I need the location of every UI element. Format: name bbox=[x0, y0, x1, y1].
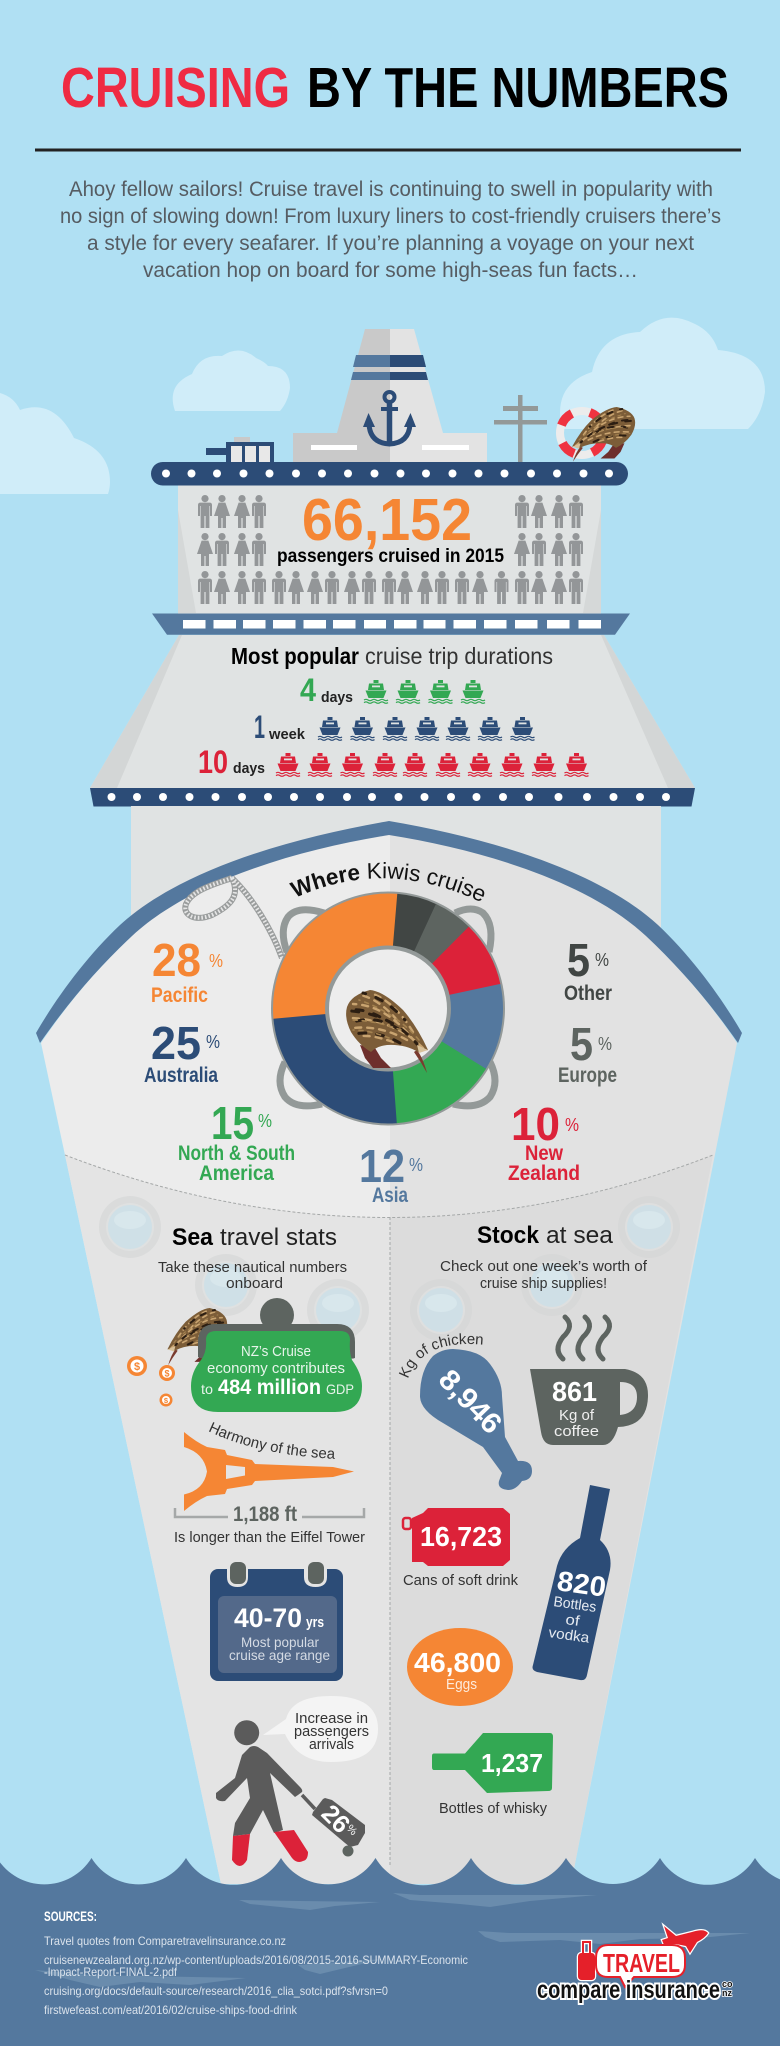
icon: Eiffel tower on its side bbox=[184, 1432, 354, 1511]
figure: traveller with suitcase: 26 bbox=[316, 1799, 355, 1839]
cloud: left bbox=[0, 393, 110, 494]
whisky bottle: 1,237 bbox=[481, 1748, 543, 1778]
heading: sea travel stats: Sea bbox=[172, 1224, 214, 1251]
heading: stock at sea bbox=[477, 1222, 614, 1249]
label: Pacific 28% bbox=[151, 934, 223, 1007]
icon: plane bbox=[662, 1926, 708, 1953]
coffee cup: Kg of bbox=[559, 1407, 595, 1424]
row: 10 days: days bbox=[233, 761, 265, 777]
calendar: age range: cruise age range bbox=[229, 1647, 330, 1663]
speech bubble: passengers arrivals bbox=[263, 1696, 378, 1762]
label: North and South America 15%: 15 bbox=[211, 1097, 254, 1149]
soft drink can: 16,723 bbox=[420, 1521, 502, 1552]
pictogram: passengers bbox=[197, 495, 583, 604]
icon: dollar coins: $ bbox=[164, 1396, 169, 1405]
icon: chicken drumstick: 8,946 bbox=[432, 1364, 508, 1441]
sources: -Impact-Report-FINAL-2.pdf bbox=[44, 1965, 178, 1979]
speech bubble: passengers arrivals: passengers bbox=[294, 1724, 369, 1740]
sources: SOURCES: bbox=[44, 1909, 97, 1924]
label: Europe 5%: 5 bbox=[570, 1018, 593, 1070]
purse: GDP stat: 484 million bbox=[218, 1376, 321, 1399]
coffee cup: 861 bbox=[552, 1376, 597, 1407]
calendar: age range: 40-70 bbox=[234, 1603, 302, 1633]
icon: dollar coins bbox=[127, 1356, 175, 1406]
sea bbox=[0, 1858, 780, 2046]
figure: traveller with suitcase: % bbox=[344, 1823, 359, 1838]
label: New Zealand 10% bbox=[508, 1098, 580, 1185]
heading: trip durations: cruise trip durations bbox=[365, 643, 553, 669]
sources: cruisenewzealand.org.nz/wp-content/uploads/2016/08/2015-2016-SUMMARY-Economic bbox=[44, 1953, 468, 1967]
rope bbox=[185, 878, 282, 958]
icon: chicken drumstick bbox=[420, 1349, 532, 1490]
row: 1 week: 1 bbox=[254, 709, 265, 745]
label: New Zealand 10%: Zealand bbox=[508, 1162, 580, 1185]
icon: lifebuoy bbox=[560, 411, 604, 455]
purse: GDP stat: GDP bbox=[326, 1381, 354, 1397]
icon: dollar coins: $ bbox=[164, 1368, 170, 1378]
logo: travel compare insurance: co bbox=[722, 1979, 733, 1989]
text: harmony of the sea: Harmony of the sea bbox=[209, 1422, 335, 1459]
intro text: a style for every seafarer. If you’re planning a voyage on your next bbox=[87, 232, 694, 255]
length bracket: 1,188 ft bbox=[233, 1503, 297, 1526]
water reflections bbox=[35, 1893, 750, 1987]
logo: travel compare insurance: nz bbox=[722, 1988, 732, 1998]
mast bbox=[494, 395, 547, 462]
heading: stock at sea: at sea bbox=[546, 1222, 614, 1249]
heading: where kiwis cruise: Where Kiwis cruise bbox=[289, 862, 484, 901]
label: Australia 25% bbox=[144, 1017, 220, 1087]
length bracket bbox=[175, 1503, 364, 1526]
vodka bottle bbox=[532, 1485, 611, 1680]
sources bbox=[44, 1909, 468, 2017]
row: 1 week: week bbox=[268, 727, 306, 743]
text: cans of soft drink: Cans of soft drink bbox=[403, 1572, 518, 1589]
icon: anchor bbox=[363, 392, 416, 445]
funnel bbox=[337, 329, 443, 433]
intro text: no sign of slowing down! From luxury liners to cost-friendly cruisers there’s bbox=[60, 205, 721, 228]
intro text bbox=[60, 178, 721, 282]
whisky bottle bbox=[432, 1733, 553, 1793]
label: Australia 25%: Australia bbox=[144, 1064, 218, 1087]
figure: traveller with suitcase bbox=[216, 1720, 365, 1866]
row: 4 days: days bbox=[321, 690, 353, 706]
sources: Travel quotes from Comparetravelinsurance.co.nz bbox=[44, 1934, 286, 1948]
text: sea travel intro bbox=[158, 1259, 347, 1292]
bridge bbox=[206, 437, 274, 462]
hull column bbox=[131, 806, 661, 1036]
text: longer than eiffel tower: Is longer than the Eiffel Tower bbox=[174, 1529, 365, 1546]
bow hull bbox=[41, 835, 737, 1884]
hull dashed seams bbox=[65, 1155, 713, 1865]
hull section 2 bbox=[90, 635, 695, 788]
label: Other 5%: 5 bbox=[567, 934, 590, 986]
row: 1 week bbox=[254, 709, 534, 745]
title bbox=[61, 56, 729, 120]
logo: travel compare insurance: TRAVEL bbox=[603, 1948, 680, 1978]
label: Europe 5%: % bbox=[598, 1034, 612, 1054]
label: Pacific 28%: 28 bbox=[152, 934, 201, 986]
vodka bottle: Bottles bbox=[552, 1594, 597, 1616]
stat: passengers cruised: passengers cruised in 2015 bbox=[277, 545, 504, 567]
purse: GDP stat: NZ’s Cruise bbox=[241, 1343, 311, 1360]
label: Australia 25%: % bbox=[206, 1032, 220, 1052]
label: Other 5% bbox=[564, 934, 612, 1005]
blue bow arc bbox=[36, 821, 742, 1043]
kiwi behind purse bbox=[167, 1308, 227, 1365]
label: Pacific 28%: Pacific bbox=[151, 984, 208, 1007]
stat: passengers cruised bbox=[277, 487, 504, 567]
soft drink can bbox=[403, 1508, 510, 1566]
text: kg of chicken: Kg of chicken bbox=[398, 1333, 483, 1378]
top deck with portholes bbox=[151, 462, 628, 486]
label: North and South America 15%: % bbox=[258, 1111, 272, 1131]
kiwi on deck bbox=[572, 407, 635, 462]
row: 10 days bbox=[198, 744, 588, 780]
speech box bbox=[596, 1945, 685, 1987]
coffee cup bbox=[530, 1369, 648, 1445]
label: New Zealand 10%: New bbox=[525, 1142, 564, 1165]
purse: GDP stat: to bbox=[201, 1381, 213, 1397]
ship superstructure bbox=[206, 329, 635, 462]
vodka bottle: 820 bbox=[555, 1565, 608, 1603]
lifebuoy handles bbox=[280, 909, 495, 1106]
vodka bottle: vodka bbox=[547, 1625, 591, 1647]
navy porthole band bbox=[90, 788, 695, 806]
calendar: age range: Most popular bbox=[241, 1634, 319, 1650]
icon: suitcase bbox=[578, 1942, 595, 1980]
label: North and South America 15%: North & South bbox=[178, 1142, 295, 1165]
donut chart: where kiwis cruise bbox=[263, 883, 513, 1134]
calendar: age range: yrs bbox=[306, 1614, 324, 1631]
row: 4 days bbox=[300, 672, 485, 708]
label: Pacific 28%: % bbox=[209, 951, 223, 971]
vodka bottle: of bbox=[564, 1612, 582, 1630]
cloud: centre bbox=[173, 350, 290, 411]
cloud: right bbox=[560, 318, 765, 429]
label: Other 5%: Other bbox=[564, 982, 612, 1005]
heading: trip durations bbox=[231, 643, 553, 669]
eggs bbox=[407, 1628, 513, 1706]
label: Australia 25%: 25 bbox=[151, 1017, 201, 1069]
upper deck block bbox=[293, 433, 487, 462]
heading: stock at sea: Stock bbox=[477, 1222, 540, 1249]
kiwi in donut bbox=[346, 990, 428, 1073]
text: sea travel intro: onboard bbox=[226, 1275, 283, 1292]
label: Asia 12%: Asia bbox=[372, 1184, 408, 1207]
speech bubble: passengers arrivals: arrivals bbox=[309, 1737, 354, 1753]
logo: travel compare insurance bbox=[537, 1926, 733, 2004]
text: stock at sea intro: Check out one week’s worth of bbox=[440, 1258, 648, 1275]
label: Europe 5%: Europe bbox=[558, 1064, 617, 1087]
purse: GDP stat bbox=[191, 1298, 362, 1412]
label: Asia 12%: 12 bbox=[359, 1140, 405, 1192]
row: 10 days: 10 bbox=[198, 744, 228, 780]
text: sea travel intro: Take these nautical numbers bbox=[158, 1259, 347, 1276]
blue window band bbox=[152, 614, 630, 635]
hull section 1 bbox=[178, 485, 601, 614]
label: New Zealand 10%: 10 bbox=[511, 1098, 560, 1150]
label: Asia 12%: % bbox=[409, 1155, 423, 1175]
portholes bbox=[99, 1196, 680, 1341]
eggs: Eggs bbox=[446, 1677, 477, 1693]
heading: sea travel stats: travel stats bbox=[220, 1224, 337, 1251]
stat: passengers cruised: 66,152 bbox=[302, 487, 472, 553]
intro text: vacation hop on board for some high-seas fun facts… bbox=[143, 259, 638, 282]
label: Asia 12% bbox=[359, 1140, 423, 1207]
label: North and South America 15%: America bbox=[199, 1162, 274, 1185]
purse: GDP stat: economy contributes bbox=[207, 1360, 345, 1377]
label: New Zealand 10%: % bbox=[565, 1115, 579, 1135]
calendar: age range bbox=[210, 1562, 343, 1681]
icon: dollar coins: $ bbox=[134, 1361, 140, 1373]
logo: travel compare insurance: compare insurance bbox=[537, 1976, 720, 2004]
heading: trip durations: Most popular bbox=[231, 643, 359, 669]
icon: coffee steam bbox=[558, 1317, 610, 1359]
row: 4 days: 4 bbox=[300, 672, 316, 708]
text: bottles of whisky: Bottles of whisky bbox=[439, 1800, 547, 1817]
coffee cup: coffee bbox=[554, 1423, 599, 1440]
text: stock at sea intro: cruise ship supplies! bbox=[480, 1275, 607, 1292]
text: stock at sea intro bbox=[440, 1258, 648, 1292]
sources: cruising.org/docs/default-source/research/2016_clia_sotci.pdf?sfvrsn=0 bbox=[44, 1984, 388, 1998]
eggs: 46,800 bbox=[414, 1647, 501, 1678]
speech bubble: passengers arrivals: Increase in bbox=[295, 1711, 368, 1727]
sources: firstwefeast.com/eat/2016/02/cruise-ships-food-drink bbox=[44, 2003, 298, 2017]
intro text: Ahoy fellow sailors! Cruise travel is continuing to swell in popularity with bbox=[69, 178, 713, 201]
title: CRUISING bbox=[61, 56, 290, 120]
label: Other 5%: % bbox=[595, 950, 609, 970]
label: North and South America 15% bbox=[178, 1097, 295, 1185]
label: Europe 5% bbox=[558, 1018, 617, 1087]
